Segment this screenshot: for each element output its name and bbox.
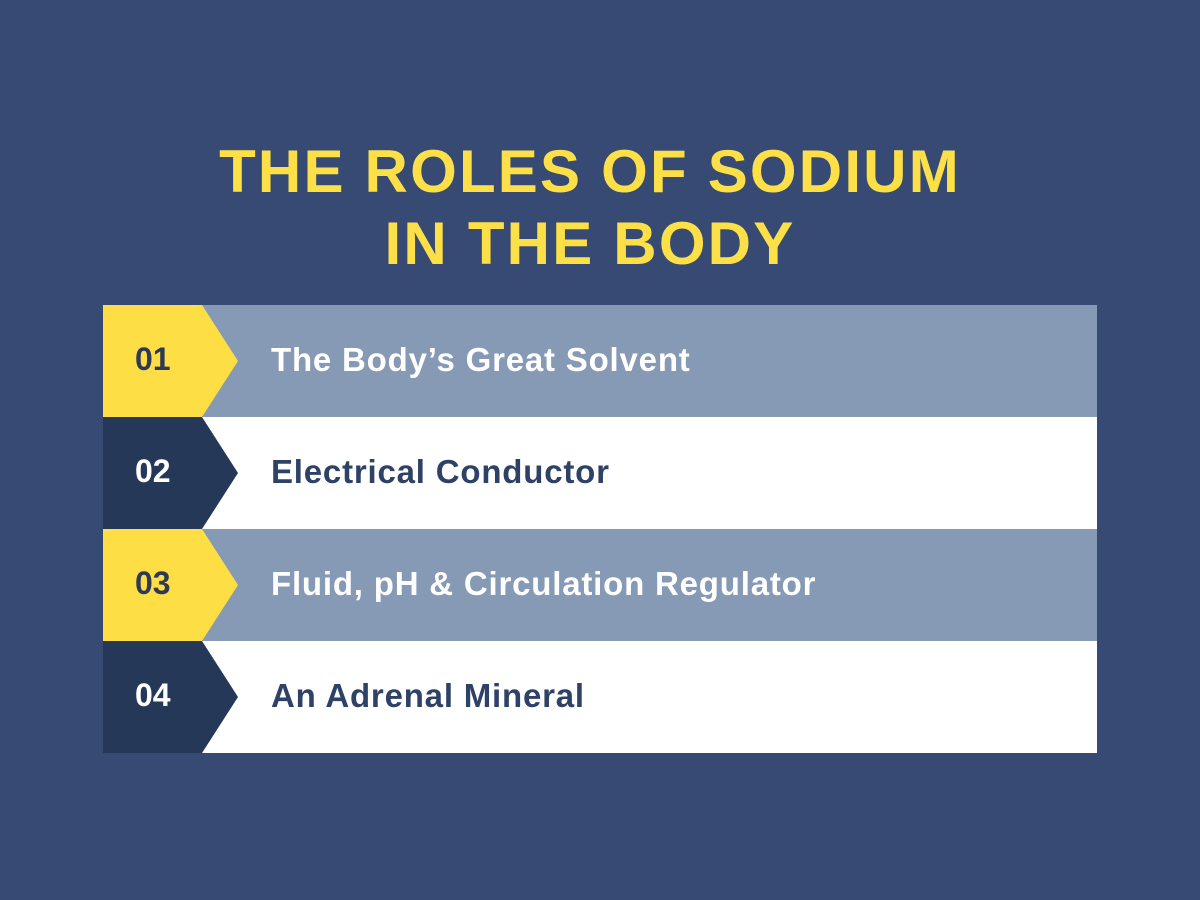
title (219, 138, 961, 277)
row 01 (103, 305, 1097, 417)
number badge 02 (103, 417, 238, 529)
number badge 01: 01 (135, 341, 171, 377)
row 02 (103, 417, 1097, 529)
number badge 01 (103, 305, 238, 417)
label 04: An Adrenal Mineral (271, 677, 585, 714)
number badge 04 (103, 641, 238, 753)
number badge 03 (103, 529, 238, 641)
row 04 (103, 641, 1097, 753)
label 01: The Body’s Great Solvent (271, 341, 691, 378)
title: IN THE BODY (385, 210, 795, 277)
number badge 04: 04 (135, 677, 171, 713)
number badge 02: 02 (135, 453, 171, 489)
label 03: Fluid, pH & Circulation Regulator (271, 565, 816, 602)
label 02: Electrical Conductor (271, 453, 610, 490)
number badge 03: 03 (135, 565, 171, 601)
title: THE ROLES OF SODIUM (219, 138, 961, 205)
row 03 (103, 529, 1097, 641)
